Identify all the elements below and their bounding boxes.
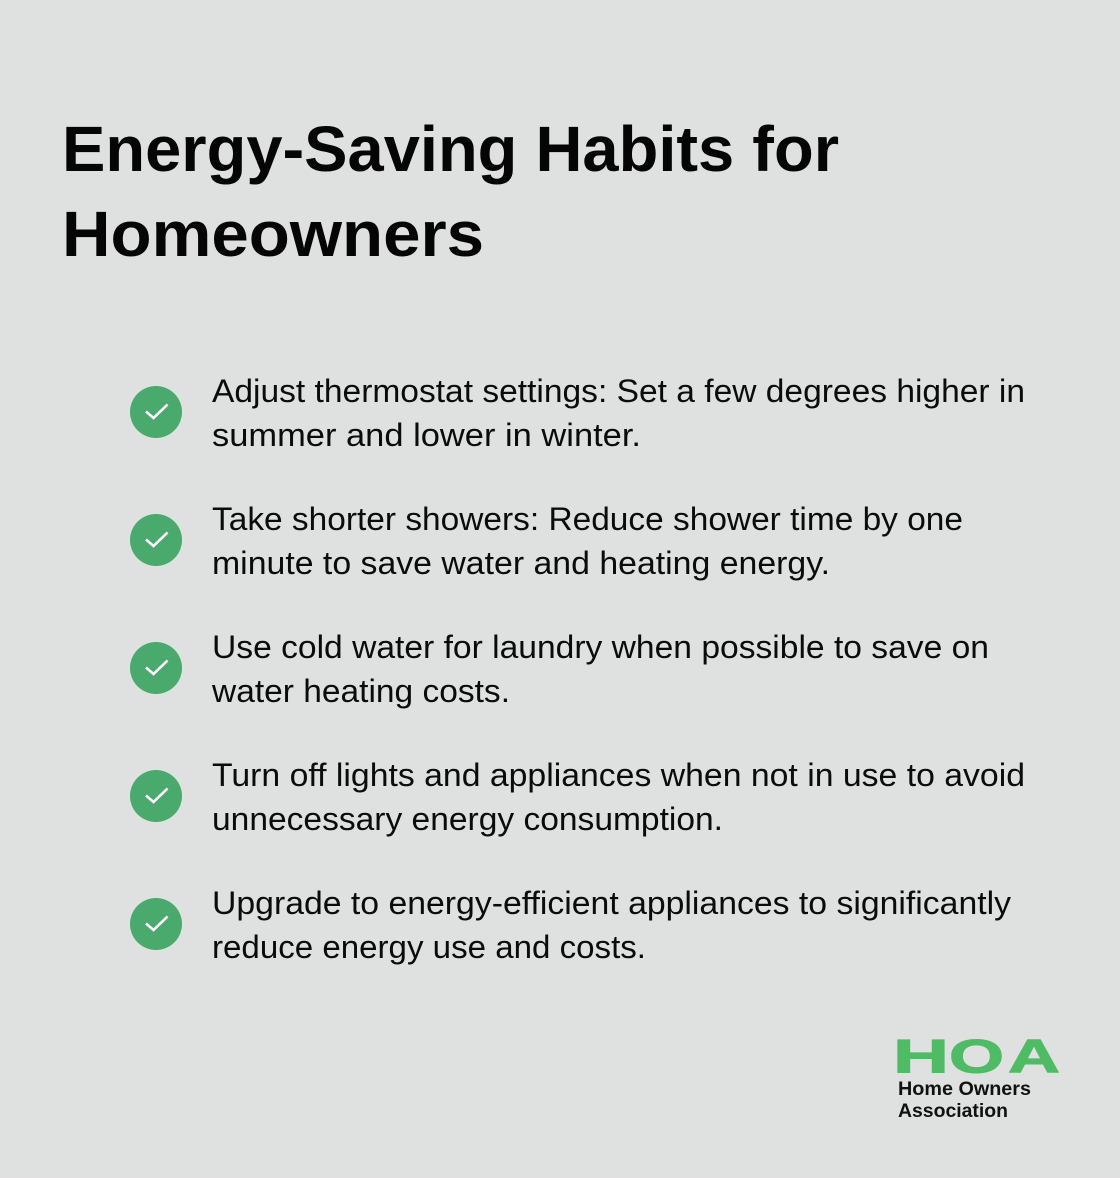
logo: HOA — [893, 1030, 1060, 1122]
item: thermostat: summer and lower in winter. — [212, 417, 641, 453]
title: Energy-Saving Habits for — [62, 113, 839, 185]
logo: HOA: H — [893, 1030, 949, 1083]
item: showers: minute to save water and heating energy. — [212, 545, 830, 581]
logo: HOA: Home Owners — [898, 1079, 1031, 1100]
item: thermostat — [130, 373, 1025, 453]
title: Homeowners — [62, 198, 484, 270]
checklist — [130, 373, 1025, 965]
logo: HOA: O — [949, 1030, 1004, 1083]
item: thermostat: Adjust thermostat settings: Set a few degrees higher in — [212, 373, 1025, 409]
item: showers: Take shorter showers: Reduce shower time by one — [212, 501, 963, 537]
item: appliances: Upgrade to energy-efficient appliances to significantly — [212, 885, 1011, 921]
item: showers — [130, 501, 963, 581]
title — [62, 113, 839, 270]
item: laundry — [130, 629, 989, 709]
item: lights: Turn off lights and appliances when not in use to avoid — [212, 757, 1025, 793]
item: lights — [130, 757, 1025, 837]
item: appliances — [130, 885, 1011, 965]
item: laundry: water heating costs. — [211, 673, 510, 709]
logo: HOA: Association — [898, 1101, 1008, 1122]
logo: HOA: A — [1008, 1030, 1060, 1083]
item: appliances: reduce energy use and costs. — [212, 929, 646, 965]
item: lights: unnecessary energy consumption. — [212, 801, 723, 837]
item: laundry: Use cold water for laundry when possible to save on — [212, 629, 989, 665]
